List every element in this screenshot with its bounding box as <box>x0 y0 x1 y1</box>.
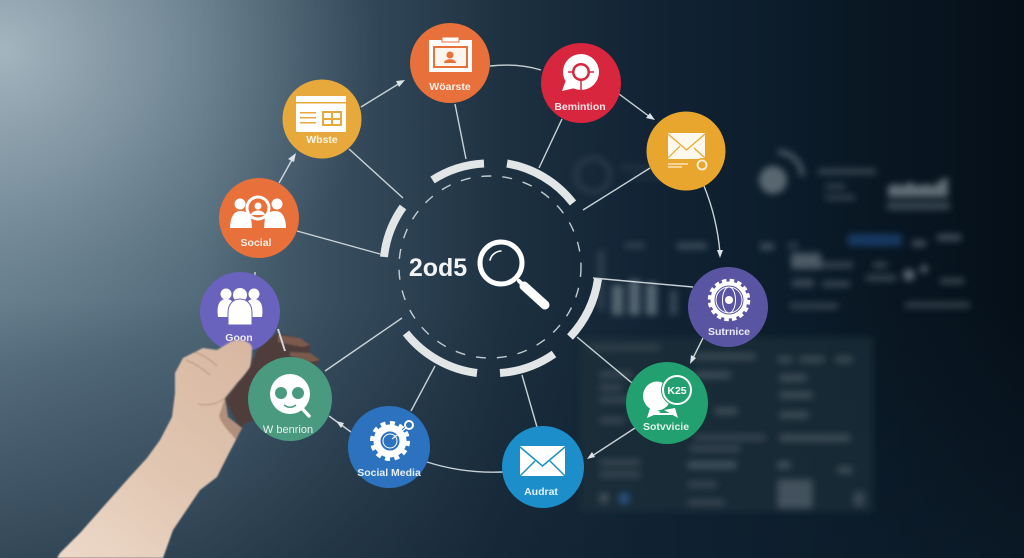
line: social to purple <box>254 272 256 277</box>
line: social to ring <box>297 231 380 254</box>
badge: green face search <box>248 357 332 441</box>
icon: envelope with seal <box>668 133 709 172</box>
hand: fingers behind badges <box>225 333 320 428</box>
badge: green chat: Sotvvicie <box>643 421 689 433</box>
badge: purple group: Goon <box>225 332 253 344</box>
connector lines and arrows <box>255 65 723 472</box>
icon: id card <box>429 37 472 72</box>
arrow: website to orange <box>361 80 405 107</box>
line: green to ring <box>325 318 402 371</box>
icon: browser window <box>296 96 346 132</box>
blurred dashboard: lower table panel <box>580 337 873 512</box>
line: purple to green <box>278 329 285 351</box>
icon: face with magnifier <box>270 374 310 416</box>
line: red to ring <box>539 119 562 168</box>
badge: green chat <box>626 362 708 444</box>
central ring <box>384 164 598 373</box>
arrow: social media to green <box>329 416 351 432</box>
line: ring to blue mail <box>522 375 537 427</box>
center label: 2od5 <box>409 254 467 282</box>
badge: yellow website: Wbste <box>306 134 338 146</box>
icon: people <box>230 196 286 228</box>
badge: top orange <box>410 23 490 103</box>
arrow: gear to chat <box>690 338 703 364</box>
badge: purple gear <box>688 267 768 347</box>
blurred dashboard: upper widgets <box>576 152 950 210</box>
icon: gear with globe <box>710 280 748 320</box>
arrow: red to mail <box>619 94 655 120</box>
badge: top orange: Wöarste <box>429 81 471 93</box>
arrow: chat to mail blue <box>587 428 635 459</box>
icon: group of people <box>218 288 262 325</box>
badge: blue mail audrat <box>502 426 584 508</box>
blurred dashboard: middle chart and stats <box>598 234 970 315</box>
thick arc segments <box>384 164 598 373</box>
badge: yellow mail <box>646 112 726 190</box>
line: ring to chat <box>577 337 632 383</box>
badge: blue mail audrat: Audrat <box>524 486 558 498</box>
arrow: social to website <box>279 153 296 183</box>
line: top orange to ring <box>455 104 466 159</box>
dashed inner circle <box>399 176 581 358</box>
badge: orange social <box>219 178 299 258</box>
badge: orange social: Social <box>241 237 272 249</box>
line: yellow to ring <box>349 149 403 198</box>
line: social media to ring <box>411 366 435 411</box>
arrow: mail to gear <box>704 186 723 258</box>
hand: palm, thumb and arm <box>57 340 252 558</box>
line: orange to red <box>490 65 541 70</box>
badge: green face search: W benrion <box>263 424 313 436</box>
icon: magnifying glass <box>480 242 545 305</box>
icon: chat target <box>562 54 599 92</box>
line: ring to gear <box>593 278 693 287</box>
icon: gear with target <box>372 421 413 459</box>
line: blue mail to social media <box>427 462 503 472</box>
icon: envelope <box>520 446 565 476</box>
line: mail to ring <box>583 168 650 210</box>
badge: blue social media <box>348 406 430 488</box>
badge: red bemintion <box>541 43 621 123</box>
badge: purple gear: Sutrnice <box>708 326 750 338</box>
badge: blue social media: Social Media <box>357 467 421 479</box>
badge: purple group <box>200 272 280 352</box>
badge: red bemintion: Bemintion <box>554 101 606 113</box>
badge: yellow website <box>282 80 362 158</box>
icon: speech bubbles: K25 <box>667 385 687 397</box>
